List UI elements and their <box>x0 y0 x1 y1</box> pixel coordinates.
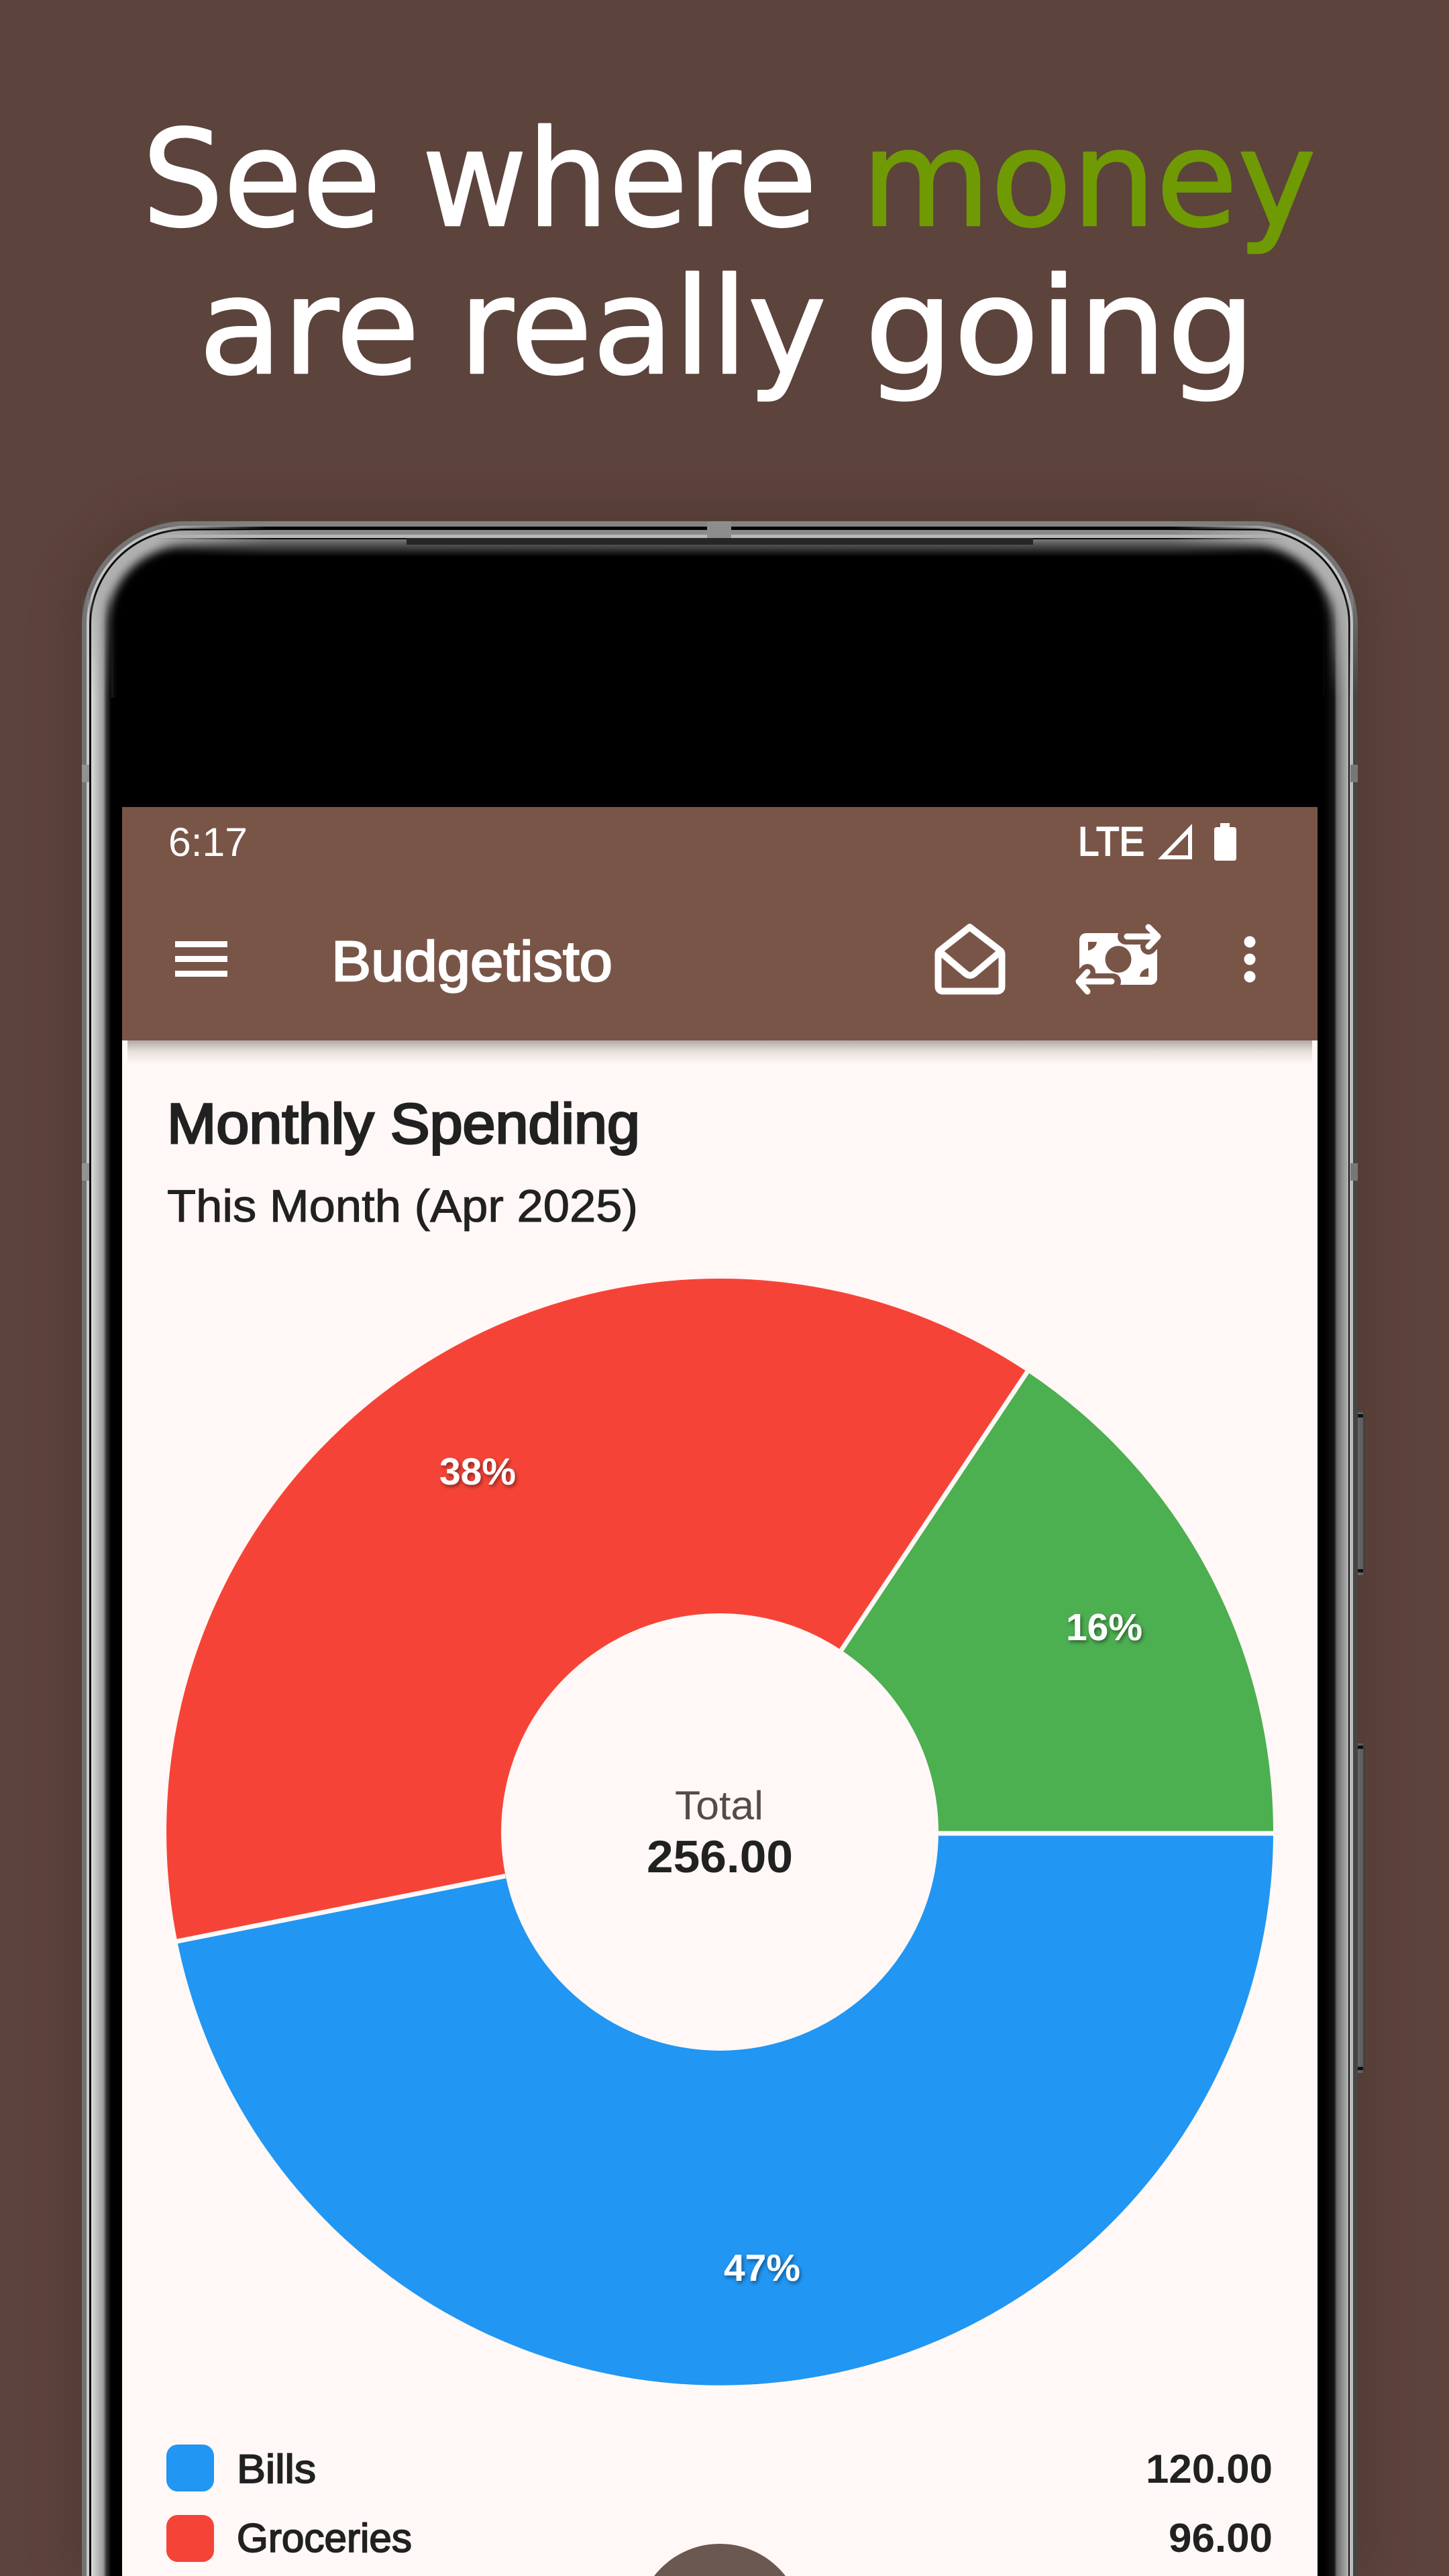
label: 47%: 47% <box>724 2247 800 2290</box>
app screen <box>122 807 1318 2576</box>
icon: open envelope <box>938 927 1002 991</box>
side button: volume <box>1358 1743 1364 2073</box>
center label: Total: Total <box>675 1783 763 1828</box>
legend row: Bills: 120.00 <box>1146 2447 1273 2491</box>
title: See <box>142 101 381 257</box>
title: going <box>865 249 1256 405</box>
title <box>142 101 1316 405</box>
left edge bands <box>82 590 111 2576</box>
slice: green 16% <box>841 1372 1273 1832</box>
title: money <box>861 101 1316 257</box>
screen background <box>122 807 1318 2576</box>
title: where <box>422 101 817 257</box>
icon: battery <box>1214 823 1236 861</box>
legend row: Bills: Bills <box>237 2447 316 2491</box>
icon: menu <box>175 941 227 977</box>
status LTE: LTE <box>1078 819 1144 864</box>
black bezel <box>111 698 1325 2576</box>
right edge bands <box>1325 590 1358 2576</box>
center value: 256.00: 256.00 <box>647 1831 793 1882</box>
title: really <box>459 249 826 405</box>
label: 38%: 38% <box>439 1450 516 1493</box>
legend row: Bills <box>166 2445 1273 2491</box>
legend row: Groceries <box>166 2515 1273 2562</box>
floating action button <box>654 2544 786 2576</box>
subheading: period: This Month (Apr 2025) <box>167 1181 638 1232</box>
side button: power <box>1358 1412 1364 1575</box>
slice: Groceries 38% <box>166 1279 1027 1940</box>
toolbar panel <box>122 807 1318 1040</box>
icon: overflow menu <box>1244 936 1256 982</box>
donut chart <box>166 1279 1275 2385</box>
phone device frame <box>67 510 1373 2576</box>
legend row: Groceries: 96.00 <box>1169 2516 1273 2561</box>
legend row: Groceries: Groceries <box>237 2516 412 2561</box>
icon: signal <box>1158 824 1192 859</box>
slice: Bills 47% <box>177 1832 1273 2385</box>
label: 16%: 16% <box>1066 1606 1142 1649</box>
icon: money exchange <box>1079 927 1158 991</box>
heading: Monthly Spending: Monthly Spending <box>167 1092 640 1155</box>
toolbar shadow <box>127 1040 1312 1065</box>
legend <box>166 2445 1273 2562</box>
top edge bands <box>154 521 1285 557</box>
status time: 6:17 <box>168 820 248 865</box>
phone body layers <box>82 521 1358 698</box>
title: are <box>199 249 420 405</box>
app title: Budgetisto <box>331 930 612 993</box>
